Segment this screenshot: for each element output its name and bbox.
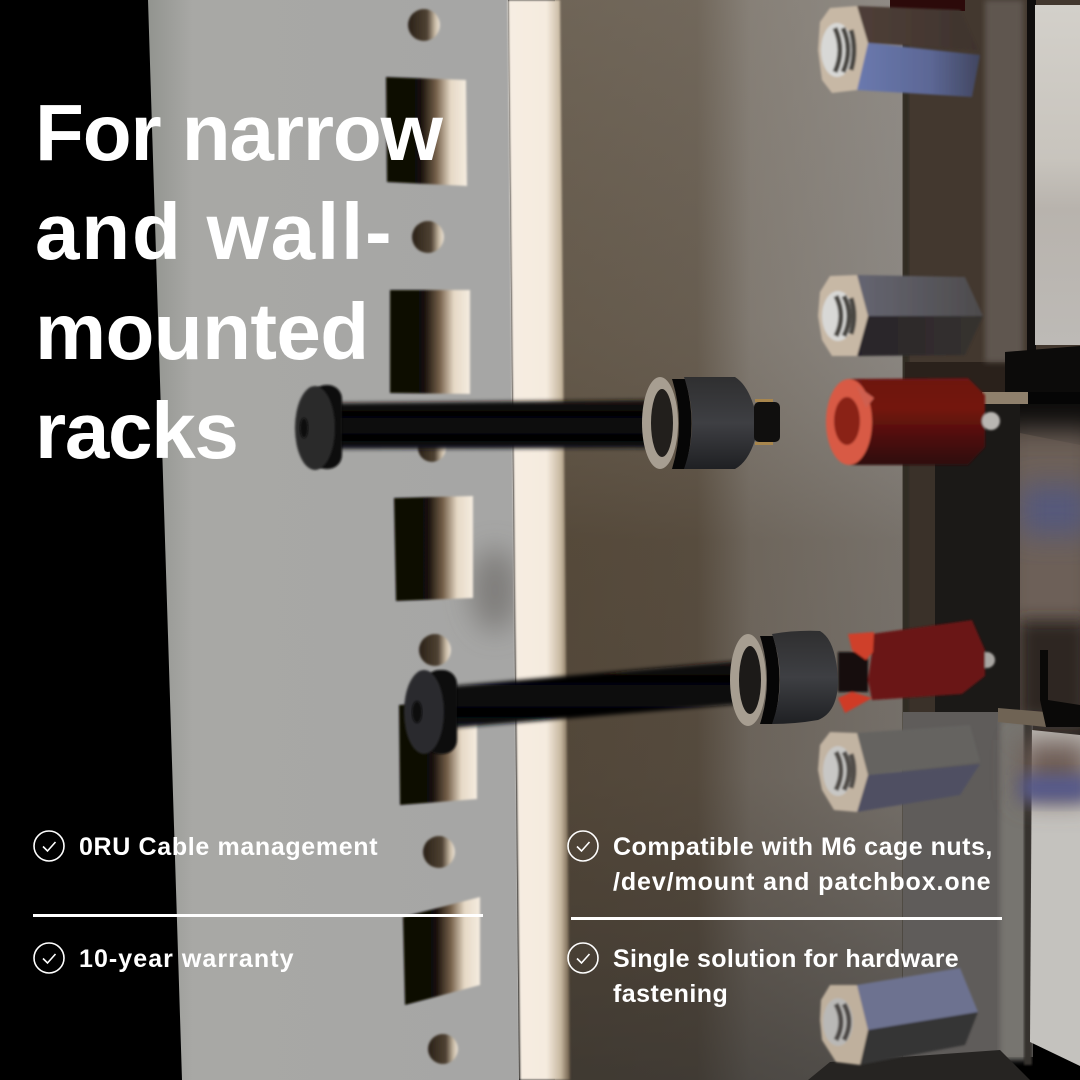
right bracket	[808, 0, 1080, 1080]
upper screw	[295, 377, 780, 470]
feature: compatibility	[567, 830, 993, 896]
standoff 3	[818, 725, 980, 812]
title	[35, 88, 443, 475]
label: Single solution for hardware	[613, 945, 959, 973]
icon: check circle	[567, 830, 599, 862]
label: /dev/mount and patchbox.one	[613, 868, 992, 896]
feature: warranty	[33, 942, 295, 974]
label: 10-year warranty	[79, 945, 295, 973]
icon: check circle	[567, 942, 599, 974]
title: and wall-	[35, 187, 393, 276]
red standoff lower	[838, 620, 995, 713]
feature: single solution	[567, 942, 959, 1008]
back wall	[555, 0, 910, 1080]
title: racks	[35, 386, 238, 475]
icon: check circle	[33, 942, 65, 974]
square holes	[386, 77, 480, 1005]
label: Compatible with M6 cage nuts,	[613, 833, 993, 861]
standoff 1	[818, 6, 980, 97]
lower screw	[404, 631, 838, 754]
standoff 2	[818, 275, 983, 356]
red standoff upper	[826, 378, 1000, 465]
label: fastening	[613, 980, 728, 1008]
label	[613, 833, 993, 896]
feature: 0RU cable management	[33, 830, 378, 862]
title: For narrow	[35, 88, 442, 177]
icon: check circle	[33, 830, 65, 862]
label	[613, 945, 959, 1008]
rail face	[148, 0, 519, 1080]
standoff 4	[820, 968, 978, 1065]
label: 0RU Cable management	[79, 833, 378, 861]
title: mounted	[35, 287, 369, 376]
glowing edge	[508, 0, 570, 1080]
round holes	[408, 9, 458, 1064]
